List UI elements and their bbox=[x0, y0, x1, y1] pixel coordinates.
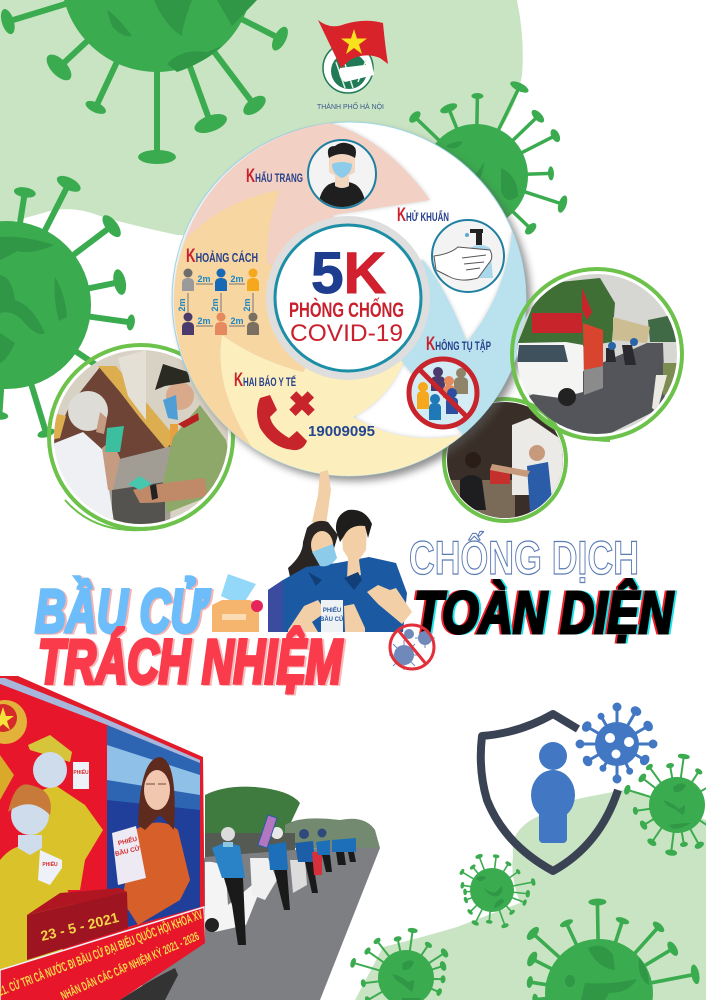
bottom banner bbox=[0, 907, 206, 1000]
distant trees bbox=[285, 818, 380, 848]
spacing labels: 2m bbox=[197, 316, 211, 326]
shield outline bbox=[481, 714, 618, 871]
row two people bbox=[182, 312, 259, 335]
spacing labels: 2m bbox=[242, 298, 252, 312]
rider four bbox=[312, 828, 332, 875]
soldier figure bbox=[28, 735, 103, 890]
woman figure: PHIẾU bbox=[42, 861, 58, 868]
candidate portrait: BẦU CỬ bbox=[114, 842, 142, 858]
emblem ring bbox=[323, 43, 374, 93]
ballot box bbox=[27, 888, 128, 960]
woman face bbox=[311, 531, 333, 559]
illustration: two youth volunteers bbox=[268, 470, 412, 632]
photo ring bbox=[444, 399, 566, 521]
collars bbox=[308, 572, 362, 590]
phòng chống: PHÒNG CHỐNG bbox=[289, 298, 404, 322]
roadside fence bbox=[205, 833, 295, 857]
photo: police officer handing leaflet bbox=[49, 345, 235, 530]
spacing labels: 2m bbox=[177, 298, 187, 312]
diagram: two metre spacing bbox=[177, 268, 259, 335]
hotline number: 19009095 bbox=[308, 423, 375, 440]
national emblem bbox=[0, 700, 27, 744]
spacing labels: 2m bbox=[197, 274, 211, 284]
photo scene bbox=[445, 400, 565, 520]
photo: health check at tent bbox=[444, 399, 566, 521]
photo scene bbox=[54, 350, 228, 524]
row one people bbox=[182, 268, 259, 291]
logo: youth union emblem bbox=[317, 20, 388, 111]
spacing labels bbox=[177, 274, 252, 326]
photo: motorbike parade bbox=[135, 787, 380, 1000]
banner text line one: 21. CỬ TRI CẢ NƯỚC ĐI BẦU CỬ ĐẠI BIỂU QUỐC HỘI KHÓA XV bbox=[0, 907, 205, 999]
spacing labels: 2m bbox=[230, 274, 244, 284]
photo scene bbox=[517, 274, 677, 434]
virus: right middle bbox=[624, 754, 706, 855]
label: khẩu trang: KHẨU TRANG bbox=[246, 166, 303, 187]
left figure bbox=[0, 755, 14, 800]
background: bottom green blob bbox=[355, 790, 706, 1000]
5K heading: 5K bbox=[311, 241, 386, 306]
icon: masked man bbox=[308, 140, 376, 208]
banner text line two: NHÂN DÂN CÁC CẤP NHIỆM KỲ 2021 - 2026 bbox=[58, 928, 201, 1000]
label: không tụ tập: KHÔNG TỤ TẬP bbox=[426, 334, 491, 355]
emblem flag bbox=[318, 20, 388, 68]
billboard truck bbox=[0, 676, 206, 1000]
headline: bầu cử: BẦU CỬ bbox=[35, 577, 211, 645]
panel horizon bbox=[107, 800, 200, 927]
hands and arms bbox=[288, 585, 412, 632]
spacing arrows bbox=[188, 284, 253, 326]
label: khoảng cách: KHOẢNG CÁCH bbox=[186, 246, 258, 267]
rider group far bbox=[332, 838, 356, 865]
icon: no gathering bbox=[409, 359, 477, 427]
top strip bbox=[0, 678, 200, 764]
ballot card: BẦU CỬ bbox=[320, 616, 344, 623]
photo ring bbox=[512, 269, 682, 441]
virus: bottom right large bbox=[525, 898, 701, 1000]
road bbox=[135, 847, 380, 1000]
emblem star bbox=[341, 29, 367, 54]
left red panel bbox=[0, 684, 107, 725]
protected person bbox=[531, 742, 575, 843]
virus: top right bbox=[407, 79, 569, 237]
icon: ballot box bbox=[212, 574, 263, 632]
coloured petals bbox=[174, 123, 526, 477]
rider two bbox=[250, 827, 290, 910]
candidate portrait bbox=[112, 757, 190, 925]
spacing labels: 2m bbox=[230, 316, 244, 326]
centre badge bbox=[266, 216, 430, 380]
icon: no virus bbox=[389, 625, 435, 670]
rider one bbox=[205, 827, 260, 945]
photo: campaign truck convoy bbox=[510, 269, 685, 441]
soldier figure: PHIẾU bbox=[73, 769, 89, 776]
rider three bbox=[290, 829, 318, 893]
blue virus bbox=[577, 704, 656, 782]
purple banner flag bbox=[258, 815, 277, 848]
label: khai báo y tế: KHAI BÁO Y TẾ bbox=[234, 370, 296, 391]
city skyline bbox=[107, 745, 200, 795]
icon: hand sanitiser bbox=[432, 220, 504, 292]
woman figure bbox=[0, 784, 78, 972]
truck wheel bbox=[120, 968, 178, 1000]
headline: trách nhiệm: TRÁCH NHIỆM bbox=[38, 628, 343, 697]
circle base bbox=[172, 122, 526, 476]
virus: bottom left bbox=[351, 928, 448, 1000]
label: khử khuẩn: KHỬ KHUẨN bbox=[397, 205, 449, 226]
blue panel bbox=[107, 725, 200, 927]
spacing labels: 2m bbox=[210, 298, 220, 312]
main 5K circle bbox=[172, 122, 531, 481]
background: top green blob bbox=[0, 0, 523, 240]
logo caption: THÀNH PHỐ HÀ NỘI bbox=[317, 101, 384, 111]
trees bbox=[205, 787, 300, 835]
riders bbox=[205, 815, 356, 945]
ballot box: 23 - 5 - 2021 bbox=[39, 909, 121, 944]
icon: phone and cross bbox=[257, 391, 315, 450]
woman hair bbox=[288, 521, 338, 577]
ballot card bbox=[320, 600, 344, 632]
billboard frame bbox=[0, 676, 205, 1000]
virus: left bbox=[0, 173, 136, 440]
left sash bbox=[268, 580, 283, 632]
virus: small centre bbox=[460, 854, 535, 928]
headline: chống dịch: CHỐNG DỊCH bbox=[409, 531, 639, 584]
photo ring bbox=[49, 345, 233, 530]
ballot card: PHIẾU bbox=[323, 607, 341, 614]
woman raised arm bbox=[312, 470, 331, 525]
covid-19: COVID-19 bbox=[290, 320, 403, 347]
blue shirts bbox=[268, 557, 407, 632]
candidate portrait: PHIẾU bbox=[117, 833, 138, 847]
woman mask bbox=[312, 544, 337, 566]
icon: protective shield bbox=[481, 704, 656, 871]
circle shadow bbox=[177, 127, 531, 481]
virus: top left bbox=[0, 0, 291, 164]
man head bbox=[336, 510, 372, 578]
